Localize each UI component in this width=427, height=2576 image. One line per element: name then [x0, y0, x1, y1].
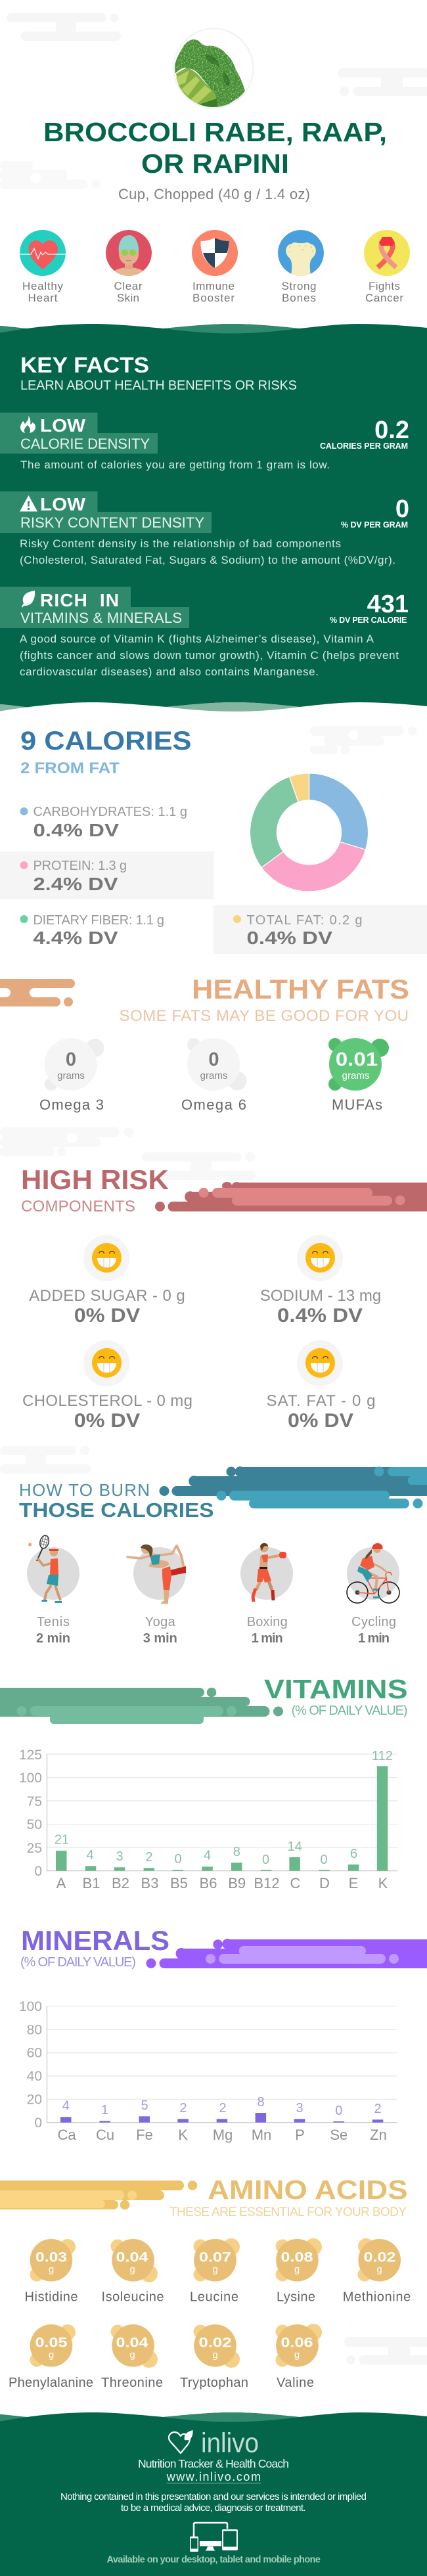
item: valine: Valine: [277, 2376, 314, 2390]
legend: carbohydrates: 0.4% DV: [33, 820, 119, 840]
bar chart: vitamins: 125: [19, 1748, 42, 1763]
bar chart: vitamins: 4: [86, 1848, 94, 1863]
item: cholesterol: [22, 1340, 192, 1432]
fact: risky content density: RISKY CONTENT DENSITY: [20, 514, 204, 531]
item: leucine: g: [212, 2264, 218, 2275]
bar chart: vitamins: 4: [204, 1849, 211, 1863]
panel: calories: [0, 726, 427, 954]
label: strong bones: Bones: [282, 292, 316, 304]
heading: minerals: MINERALS: [21, 1925, 169, 1956]
bar chart: vitamins: K: [378, 1875, 388, 1891]
background cloud: top left: [7, 13, 121, 41]
subheading: (% OF DAILY VALUE): [292, 1704, 408, 1718]
website link: www.inlivo.com: [166, 2470, 261, 2483]
item: tryptophan: [180, 2324, 248, 2390]
bar chart: minerals: 4: [62, 2099, 70, 2113]
bar chart: minerals: 2: [374, 2102, 382, 2116]
disclaimer: [60, 2491, 367, 2514]
bar chart: vitamins: B12: [254, 1875, 280, 1891]
background cloud: above burn section: [0, 1446, 91, 1474]
bar chart: minerals: Se: [330, 2127, 348, 2143]
label: strong bones: [281, 280, 317, 304]
item: added sugar: ADDED SUGAR - 0 g: [29, 1287, 185, 1305]
stat: calories per gram: CALORIES PER GRAM: [320, 441, 408, 451]
icon: clear skin: [106, 230, 152, 276]
legend: total fat: 0.4% DV: [247, 928, 332, 948]
item: omega 6: [181, 1038, 247, 1113]
bar chart: minerals: P: [295, 2127, 305, 2143]
item: isoleucine: g: [129, 2264, 135, 2275]
item: MUFAs: 0.01: [336, 1049, 378, 1070]
fact: calorie density: CALORIE DENSITY: [20, 436, 150, 452]
bar chart: vitamins: 0: [34, 1864, 42, 1879]
bar chart: minerals: 60: [27, 2046, 42, 2061]
fact: rich in vitamins and minerals: [0, 587, 409, 678]
heading: vitamins: VITAMINS: [264, 1674, 408, 1704]
fact: rich in vitamins and minerals: A good source of Vitamin K (fights Alzheimer’s disease), Vitamin A: [20, 633, 374, 645]
activity: yoga: 3 min: [143, 1631, 177, 1646]
bar chart: vitamins: 0: [320, 1853, 328, 1867]
bar chart: vitamins: 100: [19, 1771, 42, 1786]
item: histidine: g: [49, 2264, 54, 2275]
bar chart: minerals: 40: [27, 2069, 42, 2084]
item: phenylalanine: g: [49, 2349, 54, 2361]
item: isoleucine: Isoleucine: [101, 2290, 164, 2305]
title: BROCCOLI RABE, RAAP,: [43, 117, 387, 147]
label: healthy heart: Heart: [28, 292, 58, 304]
legend: protein: [20, 859, 127, 894]
bar chart: minerals: K: [178, 2127, 188, 2143]
item: omega 6: 0: [208, 1049, 219, 1070]
item: omega 3: 0: [66, 1049, 76, 1070]
item: tryptophan: 0.02: [198, 2336, 231, 2351]
subtitle: serving size: Cup, Chopped (40 g / 1.4 oz): [118, 186, 310, 202]
bar chart: vitamins: B9: [228, 1875, 246, 1891]
benefit icons row: [20, 230, 410, 304]
item: lysine: g: [294, 2264, 300, 2275]
highlight bands: [0, 851, 427, 954]
bar chart: vitamins: 6: [350, 1847, 357, 1861]
legend: carbohydrates: CARBOHYDRATES: 1.1 g: [33, 805, 187, 819]
bar chart: minerals: [19, 1999, 397, 2143]
label: clear skin: [114, 280, 143, 304]
item: phenylalanine: [9, 2324, 93, 2390]
label: healthy heart: [22, 280, 63, 304]
item: MUFAs: grams: [342, 1070, 369, 1081]
banner: yellow streak: [0, 2181, 197, 2209]
banner: orange streak: [0, 979, 75, 1006]
heading: calories: 9 CALORIES: [20, 727, 192, 756]
icon: fights cancer: [364, 230, 410, 276]
activity: boxing: [240, 1543, 293, 1646]
disclaimer: to be a medical advice, diagnosis or treatment.: [121, 2502, 306, 2514]
item: threonine: 0.04: [116, 2336, 148, 2351]
stat: calories per gram: 0.2: [374, 417, 409, 444]
bar chart: vitamins: [19, 1748, 397, 1891]
item: lysine: [276, 2238, 322, 2305]
bar chart: vitamins: E: [349, 1875, 358, 1891]
disclaimer: Nothing contained in this presentation and our services is intended or implied: [60, 2491, 367, 2502]
label: fights cancer: [365, 280, 403, 304]
subheading: components: COMPONENTS: [21, 1198, 135, 1215]
item: histidine: Histidine: [25, 2290, 78, 2305]
subheading: SOME FATS MAY BE GOOD FOR YOU: [120, 1007, 409, 1025]
title: [43, 117, 387, 179]
legend: dietary fiber: 4.4% DV: [33, 928, 118, 948]
background clouds: above high risk: [0, 1127, 256, 1180]
bar chart: minerals: 1: [101, 2103, 108, 2117]
item: omega 3: [39, 1038, 104, 1113]
label: immune booster: Booster: [192, 292, 235, 304]
stat: percent DV per calorie: 431: [367, 591, 409, 618]
item: MUFAs: [328, 1038, 389, 1113]
bar chart: minerals: 2: [219, 2101, 227, 2115]
item: valine: [276, 2324, 322, 2390]
bar chart: minerals: Zn: [370, 2127, 387, 2143]
bar chart: minerals: Ca: [57, 2127, 76, 2143]
panel: minerals: [19, 1925, 427, 2143]
stat: percent DV per gram: [341, 495, 409, 530]
panel: how to burn those calories: [19, 1466, 427, 1646]
label: clear skin: Skin: [117, 292, 139, 304]
fact: risky content density: LOW: [40, 494, 86, 514]
item: isoleucine: 0.04: [116, 2250, 148, 2265]
bar chart: vitamins: B3: [141, 1875, 158, 1891]
activity: boxing: Boxing: [247, 1615, 288, 1629]
legend: total fat: TOTAL FAT: 0.2 g: [247, 913, 363, 928]
item: cholesterol: 0% DV: [74, 1410, 140, 1432]
item: valine: 0.06: [281, 2336, 313, 2351]
item: saturated fat: SAT. FAT - 0 g: [267, 1392, 376, 1410]
item: tryptophan: Tryptophan: [180, 2376, 248, 2390]
icon: flame: [20, 416, 35, 433]
fact: rich in vitamins and minerals: VITAMINS & MINERALS: [20, 610, 182, 626]
bar chart: vitamins: 2: [145, 1850, 153, 1864]
heading: key facts: KEY FACTS: [20, 353, 149, 377]
item: methionine: 0.02: [364, 2250, 395, 2265]
item: phenylalanine: 0.05: [35, 2336, 68, 2351]
heading: high risk: HIGH RISK: [21, 1164, 169, 1195]
bar chart: minerals: 5: [141, 2098, 148, 2113]
activity: cycling: Cycling: [351, 1615, 396, 1629]
donut chart: [250, 773, 369, 892]
fact: risky content density: [0, 491, 409, 566]
banner: purple streak: [146, 1939, 427, 1968]
panel: healthy fats: [0, 974, 409, 1113]
legend: total fat: [233, 913, 363, 948]
item: threonine: Threonine: [101, 2376, 163, 2390]
item: saturated fat: 0% DV: [288, 1410, 353, 1432]
footer: [0, 2412, 427, 2576]
icon: healthy heart: [20, 230, 66, 276]
panel: vitamins: [0, 1674, 408, 1891]
bar chart: vitamins: 112: [372, 1749, 393, 1763]
label: strong bones: Strong: [281, 280, 317, 292]
item: omega 6: Omega 6: [181, 1096, 246, 1113]
item: lysine: 0.08: [281, 2250, 313, 2265]
activity: boxing: 1 min: [252, 1631, 283, 1646]
legend: dietary fiber: [20, 913, 164, 948]
food image: broccoli: [173, 29, 254, 110]
fact: rich in vitamins and minerals: cardiovascular diseases) and also contains Manganese.: [20, 666, 319, 678]
activity: tennis: [27, 1535, 79, 1646]
activity: cycling: 1 min: [358, 1631, 390, 1646]
banner: teal streak: [159, 1466, 427, 1508]
bar chart: vitamins: 8: [233, 1845, 240, 1859]
background cloud: top right: [338, 68, 427, 96]
legend: carbohydrates: [20, 805, 187, 840]
availability note: Available on your desktop, tablet and mobile phone: [106, 2555, 321, 2565]
bar chart: minerals: Cu: [96, 2127, 114, 2143]
bar chart: vitamins: 0: [174, 1852, 182, 1866]
item: histidine: 0.03: [35, 2250, 67, 2265]
background cloud: [344, 2337, 427, 2364]
item: threonine: [101, 2324, 163, 2390]
bar chart: minerals: 20: [27, 2092, 42, 2108]
item: histidine: [25, 2239, 78, 2305]
fact: rich in vitamins and minerals: RICH IN: [40, 590, 119, 610]
icon: immune booster: [192, 230, 238, 276]
item: leucine: 0.07: [199, 2250, 231, 2265]
activity: cycling: [347, 1543, 399, 1646]
item: valine: g: [294, 2349, 300, 2361]
icon: strong bones: [278, 230, 324, 276]
item: phenylalanine: Phenylalanine: [9, 2376, 93, 2390]
bar chart: vitamins: 0: [262, 1853, 269, 1867]
activity: tennis: 2 min: [36, 1631, 70, 1646]
label: clear skin: Clear: [114, 280, 143, 292]
bar chart: minerals: 2: [179, 2101, 187, 2115]
panel: amino acids: [0, 2175, 427, 2390]
bar chart: vitamins: 3: [116, 1849, 124, 1864]
label: fights cancer: Fights: [369, 280, 400, 292]
bar chart: minerals: 80: [27, 2023, 42, 2038]
bar chart: vitamins: B5: [170, 1875, 188, 1891]
heading: how to burn: HOW TO BURN: [19, 1480, 150, 1500]
fact: calorie density: The amount of calories you are getting from 1 gram is low.: [20, 459, 330, 471]
fact: rich in vitamins and minerals: (fights cancer and slows down tumor growth), Vitamin C (helps prevent: [20, 649, 399, 662]
stat: percent DV per calorie: % DV PER CALORIE: [330, 616, 407, 625]
icon: devices: [190, 2523, 238, 2552]
item: omega 3: Omega 3: [39, 1096, 104, 1113]
icon: leaf: [22, 591, 35, 608]
legend: dietary fiber: DIETARY FIBER: 1.1 g: [33, 913, 164, 928]
legend: protein: PROTEIN: 1.3 g: [33, 859, 127, 873]
item: sodium: SODIUM - 13 mg: [260, 1287, 381, 1305]
item: added sugar: [29, 1235, 185, 1326]
logo: inlivo: inlivo: [201, 2428, 259, 2458]
background cloud: left of title: [0, 161, 101, 189]
bar chart: minerals: Mg: [213, 2127, 233, 2143]
icon: warning triangle: [20, 495, 37, 511]
subheading: (% OF DAILY VALUE): [20, 1955, 136, 1970]
stat: percent DV per calorie: [330, 591, 409, 625]
bar chart: vitamins: B1: [83, 1875, 100, 1891]
banner: green streak: [0, 1688, 283, 1724]
bar chart: minerals: 100: [19, 1999, 42, 2014]
activity: yoga: [127, 1545, 186, 1646]
item: MUFAs: MUFAs: [332, 1096, 382, 1113]
stat: percent DV per gram: % DV PER GRAM: [341, 520, 408, 530]
panel: key facts: [0, 324, 427, 712]
bar chart: vitamins: B6: [200, 1875, 217, 1891]
item: leucine: Leucine: [190, 2290, 238, 2305]
item: threonine: g: [129, 2349, 135, 2361]
bar chart: minerals: 3: [296, 2101, 303, 2115]
label: healthy heart: Healthy: [22, 280, 63, 292]
item: sodium: [260, 1235, 381, 1326]
banner: red streak: [155, 1182, 427, 1211]
item: methionine: Methionine: [343, 2290, 411, 2305]
fact: risky content density: (Cholesterol, Saturated Fat, Sugars & Sodium) to the amount (%DV/gr).: [20, 554, 395, 566]
bar chart: vitamins: 14: [287, 1840, 302, 1854]
label: immune booster: [192, 280, 235, 304]
heading: healthy fats: HEALTHY FATS: [192, 974, 409, 1005]
bar chart: vitamins: A: [56, 1875, 66, 1891]
heading: amino acids: AMINO ACIDS: [208, 2175, 408, 2205]
legend: protein: 2.4% DV: [33, 874, 118, 894]
activity: yoga: Yoga: [145, 1615, 176, 1629]
item: omega 6: grams: [200, 1070, 227, 1081]
fact: calorie density: [0, 413, 409, 471]
bar chart: vitamins: 21: [55, 1833, 69, 1847]
bar chart: vitamins: 75: [27, 1794, 42, 1809]
item: sodium: 0.4% DV: [277, 1305, 363, 1326]
subheading: THESE ARE ESSENTIAL FOR YOUR BODY: [169, 2205, 407, 2219]
item: methionine: [343, 2238, 411, 2305]
item: methionine: g: [376, 2264, 382, 2275]
stat: percent DV per gram: 0: [395, 495, 409, 523]
activity: tennis: Tenis: [37, 1615, 70, 1629]
bar chart: minerals: Fe: [136, 2127, 153, 2143]
label: immune booster: Immune: [192, 280, 235, 292]
item: added sugar: 0% DV: [74, 1305, 140, 1326]
bar chart: vitamins: C: [290, 1875, 300, 1891]
item: omega 3: grams: [57, 1070, 85, 1081]
item: leucine: [190, 2238, 240, 2305]
tagline: Nutrition Tracker & Health Coach: [138, 2457, 289, 2470]
bar chart: vitamins: 25: [27, 1841, 42, 1856]
bar chart: vitamins: D: [319, 1875, 330, 1891]
stat: calories per gram: [320, 417, 409, 451]
bar chart: minerals: 0: [34, 2115, 42, 2131]
bar chart: vitamins: B2: [112, 1875, 129, 1891]
label: fights cancer: Cancer: [365, 292, 403, 304]
bar chart: minerals: 0: [335, 2104, 342, 2118]
bar chart: minerals: 8: [257, 2095, 265, 2110]
title: OR RAPINI: [141, 148, 289, 179]
item: isoleucine: [101, 2239, 164, 2305]
fact: risky content density: Risky Content density is the relationship of bad components: [20, 537, 341, 550]
panel: high risk components: [21, 1164, 427, 1432]
logo: inlivo: [169, 2428, 259, 2458]
item: lysine: Lysine: [277, 2290, 315, 2305]
bar chart: vitamins: 50: [27, 1817, 42, 1832]
bar chart: minerals: Mn: [252, 2127, 271, 2143]
fact: calorie density: LOW: [40, 415, 86, 436]
heading: those calories: THOSE CALORIES: [19, 1499, 214, 1522]
subheading: LEARN ABOUT HEALTH BENEFITS OR RISKS: [20, 378, 297, 393]
background cloud: [310, 726, 417, 754]
subheading: from fat: 2 FROM FAT: [20, 759, 120, 777]
item: cholesterol: CHOLESTEROL - 0 mg: [22, 1392, 192, 1410]
item: saturated fat: [267, 1340, 376, 1432]
item: tryptophan: g: [212, 2349, 218, 2361]
